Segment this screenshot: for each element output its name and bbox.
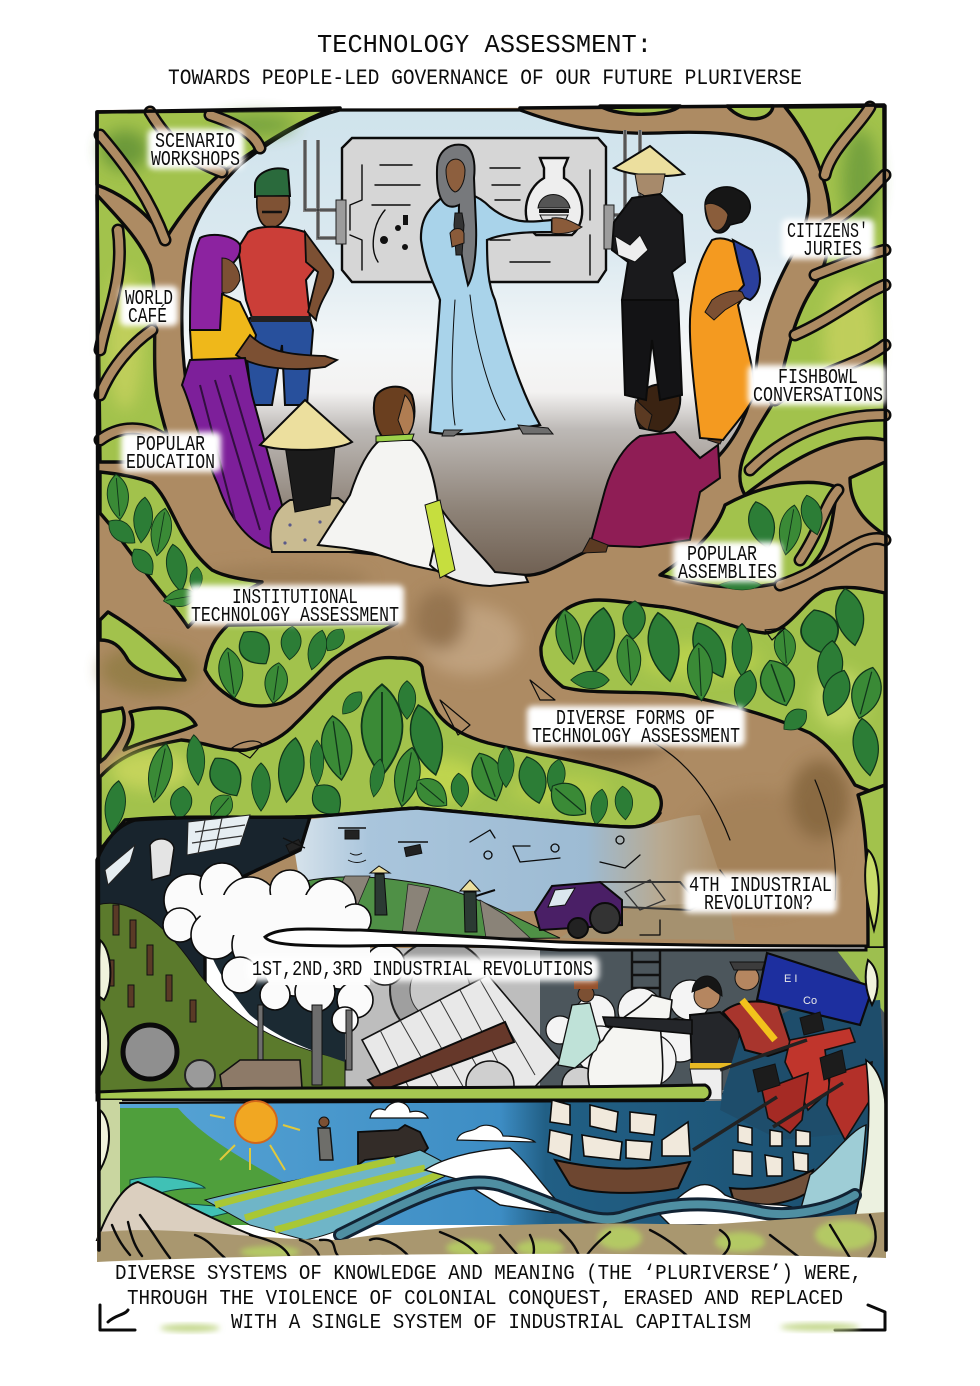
green hill [120, 1108, 305, 1225]
spinning machine [362, 975, 560, 1092]
foot soldiers [693, 1012, 872, 1150]
label: popular education [126, 434, 215, 475]
waves [425, 1125, 866, 1225]
bottom corner marks [100, 1305, 885, 1332]
black ox [358, 1125, 428, 1165]
farmers [370, 866, 495, 932]
sea and sky [120, 1100, 886, 1225]
person: man in red shirt and green hat [238, 168, 333, 405]
right ground [560, 904, 735, 940]
smoke behind rider [546, 980, 710, 1086]
label: fishbowl conversations: CONVERSATIONS [753, 385, 883, 408]
chimneys [258, 1005, 352, 1085]
foliage: institutional pocket [205, 623, 397, 706]
farmer [318, 1117, 333, 1160]
person: man in black with conical hat [612, 146, 685, 400]
label: popular assemblies: POPULAR [687, 544, 757, 567]
leaves: seated group pocket [103, 473, 203, 609]
background grey band [340, 948, 886, 1092]
foliage: top right small gap [727, 106, 773, 119]
ship: small ship [730, 1125, 813, 1206]
root band [97, 1212, 886, 1270]
label: diverse forms of technology assessment [532, 708, 740, 749]
person: seated man in maroon shirt [582, 384, 730, 553]
presentation board with pipes [305, 130, 640, 282]
label: first to third industrial revolutions: 1ST,2ND,3RD INDUSTRIAL REVOLUTIONS [252, 959, 593, 982]
label: fishbowl conversations [753, 367, 883, 408]
sky [290, 808, 730, 912]
ladder tower [632, 950, 660, 1012]
outer space [97, 817, 310, 1090]
redcoat with flag [723, 953, 873, 1056]
contour line above sky [296, 808, 660, 827]
label: world cafe: CAFÉ [128, 305, 167, 329]
label: popular assemblies [678, 544, 777, 585]
roots [112, 1215, 876, 1258]
foliage: large lower left pocket [100, 658, 661, 850]
foliage: left mid pocket [100, 708, 124, 762]
foliage: seated group pocket [100, 472, 262, 627]
redcoat with flag: E I [784, 973, 797, 985]
tractor truck [535, 880, 700, 938]
foliage: top right [740, 106, 885, 495]
panel: foliage background areas [97, 106, 885, 948]
foliage: left of trunk [97, 195, 178, 462]
stream [130, 1177, 240, 1222]
bottom text band [97, 1254, 886, 1333]
label: scenario workshops: WORKSHOPS [151, 149, 240, 172]
circuit traces [470, 830, 660, 935]
ship: large galleon [548, 1100, 690, 1193]
sun [210, 1101, 300, 1170]
bottom caption: WITH A SINGLE SYSTEM OF INDUSTRIAL CAPITALISM [231, 1312, 751, 1335]
pale margin left [97, 1100, 122, 1240]
title: TECHNOLOGY ASSESSMENT: [317, 30, 652, 60]
leaves: large lower left pocket [102, 681, 634, 835]
foliage: large right leaf pocket [541, 587, 885, 800]
ploughed rows [318, 876, 530, 938]
tree stumps on hill [108, 905, 196, 1022]
left edge decorative blobs [97, 850, 879, 1170]
white right border blobs [850, 1060, 886, 1240]
label: institutional technology assessment: INSTITUTIONAL [232, 587, 358, 610]
beige hill [97, 1182, 265, 1240]
leaves: large right pocket [552, 586, 887, 777]
white ribbon [265, 929, 866, 950]
foliage: narrow strip right of lower trunk [858, 785, 885, 948]
officer in black uniform [603, 976, 740, 1100]
foliage: right side small pocket [850, 462, 885, 535]
panel: first to third industrial revolutions [97, 863, 886, 1109]
dark road [203, 900, 345, 1062]
person: woman with purple skirt and headwrap [182, 235, 337, 550]
label: popular education: EDUCATION [126, 452, 215, 475]
green strip line [97, 1085, 710, 1100]
label: 4th industrial revolution: 4TH INDUSTRIAL [689, 875, 832, 898]
thin branches among the foliage [100, 107, 885, 585]
rider on white horse [558, 981, 672, 1088]
person: pregnant woman in orange sari [690, 187, 760, 440]
gear wheels lower [466, 1061, 598, 1109]
panel: upper scene figures [182, 130, 760, 586]
tree: trunk and branches base [97, 106, 886, 950]
label: popular education: POPULAR [136, 434, 205, 457]
panel: fourth industrial revolution [97, 808, 735, 1090]
foliage: top centre gap [600, 106, 680, 114]
label: diverse forms of technology assessment: DIVERSE FORMS OF [556, 708, 715, 731]
frame outline [97, 105, 886, 1250]
dark ground behind soldiers [720, 1000, 886, 1140]
large gear [390, 940, 490, 1040]
root greenery [240, 1220, 875, 1258]
terraced fields [205, 1150, 455, 1240]
panel: pre-colonial landscape and colonial ships [97, 953, 886, 1270]
clouds [370, 1102, 535, 1142]
panel: clearing with sky and ground [182, 110, 809, 576]
trunk: bark detail [232, 628, 836, 905]
label: scenario workshops [151, 131, 240, 172]
satellite and solar panels [105, 815, 250, 885]
subtitle: TOWARDS PEOPLE-LED GOVERNANCE OF OUR FUTURE PLURIVERSE [168, 66, 802, 91]
foliage texture: yellow and olive blotches [101, 115, 878, 804]
bottom caption: DIVERSE SYSTEMS OF KNOWLEDGE AND MEANING (THE ‘PLURIVERSE’) WERE, [115, 1263, 862, 1286]
icon: flask with burger [526, 158, 582, 235]
leaves: popular assemblies pocket [718, 493, 827, 590]
label: world cafe [125, 288, 173, 329]
factory house [220, 1060, 302, 1088]
person: seated figure in conical hat [260, 400, 360, 552]
label: 4th industrial revolution: REVOLUTION? [704, 893, 813, 916]
main smoke cloud [163, 863, 405, 1033]
label: 4th industrial revolution [689, 875, 832, 916]
bottom caption: THROUGH THE VIOLENCE OF COLONIAL CONQUEST, ERASED AND REPLACED [127, 1288, 843, 1311]
leaves: institutional pocket [216, 624, 349, 705]
redcoat with flag: Co [803, 995, 817, 1007]
label: institutional technology assessment: TECHNOLOGY ASSESSMENT [191, 605, 399, 628]
saw wheel [123, 1025, 177, 1079]
labels: white glow backgrounds [120, 129, 886, 981]
label: citizens juries [787, 221, 868, 262]
label: popular assemblies: ASSEMBLIES [678, 562, 777, 585]
foliage: left lower pocket [124, 708, 196, 750]
label: institutional technology assessment [191, 587, 399, 628]
green field [300, 877, 560, 942]
foliage: popular assemblies pocket [660, 482, 838, 587]
person: presenter in blue dress [421, 145, 582, 436]
foliage: left margin pocket [100, 612, 185, 680]
sea currents [340, 1182, 855, 1235]
brown roller [368, 1022, 514, 1092]
person: seated man in white kurta [318, 387, 528, 586]
bottom caption [115, 1263, 862, 1335]
foliage: top left corner [97, 110, 330, 240]
label: citizens juries: JURIES [803, 239, 862, 262]
label: world cafe: WORLD [125, 288, 173, 311]
label: diverse forms of technology assessment: TECHNOLOGY ASSESSMENT [532, 726, 740, 749]
label: citizens juries: CITIZENS' [787, 221, 868, 244]
label: scenario workshops: SCENARIO [155, 131, 235, 154]
drones [283, 828, 428, 862]
top line of sea [120, 1101, 704, 1103]
olive hill [97, 903, 345, 1092]
label: fishbowl conversations: FISHBOWL [778, 367, 858, 390]
